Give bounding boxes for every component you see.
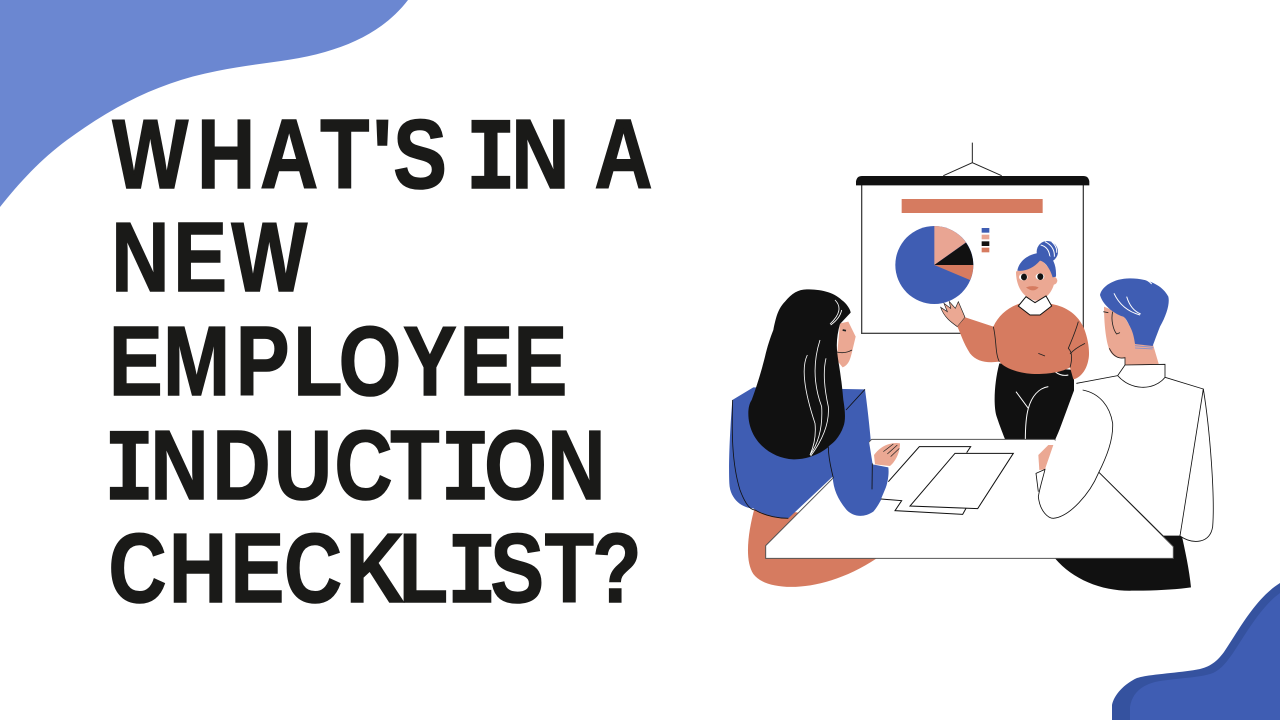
- title: EMPLOYEE: [109, 306, 567, 416]
- man neck and face: [1104, 307, 1159, 366]
- seated man: [1036, 278, 1213, 541]
- man shirt: [1077, 364, 1203, 536]
- seated woman: [729, 289, 889, 518]
- lower body of seated man: [1055, 535, 1191, 591]
- presenter head: [1016, 241, 1058, 301]
- woman jacket: [729, 387, 889, 518]
- presenter trousers: [995, 363, 1074, 442]
- man hair: [1100, 278, 1169, 346]
- background blob: top left: [0, 0, 408, 207]
- presenter collar: [1018, 296, 1052, 315]
- papers on table: [881, 447, 1013, 514]
- woman face: [837, 322, 856, 367]
- title: NEW: [111, 202, 308, 312]
- presenter sweater: [957, 301, 1089, 379]
- man hand: [1038, 445, 1053, 470]
- title: [104, 99, 653, 634]
- title: WHAT'S IN A: [112, 99, 653, 220]
- chair of seated woman: [748, 507, 877, 587]
- title: CHECKLIST?: [108, 513, 641, 634]
- chart legend: [982, 228, 989, 252]
- title: INDUCTION: [104, 410, 605, 531]
- presenter: [941, 241, 1089, 442]
- pie chart: [895, 226, 973, 304]
- background blob: bottom right: [1112, 583, 1280, 720]
- man arm: [1036, 383, 1113, 518]
- presenter hand: [941, 302, 965, 327]
- illustration: meeting scene: [729, 143, 1213, 591]
- presentation screen: [856, 143, 1089, 333]
- meeting table: [766, 439, 1173, 558]
- woman arm and hand: [828, 417, 900, 516]
- woman hair: [748, 289, 851, 459]
